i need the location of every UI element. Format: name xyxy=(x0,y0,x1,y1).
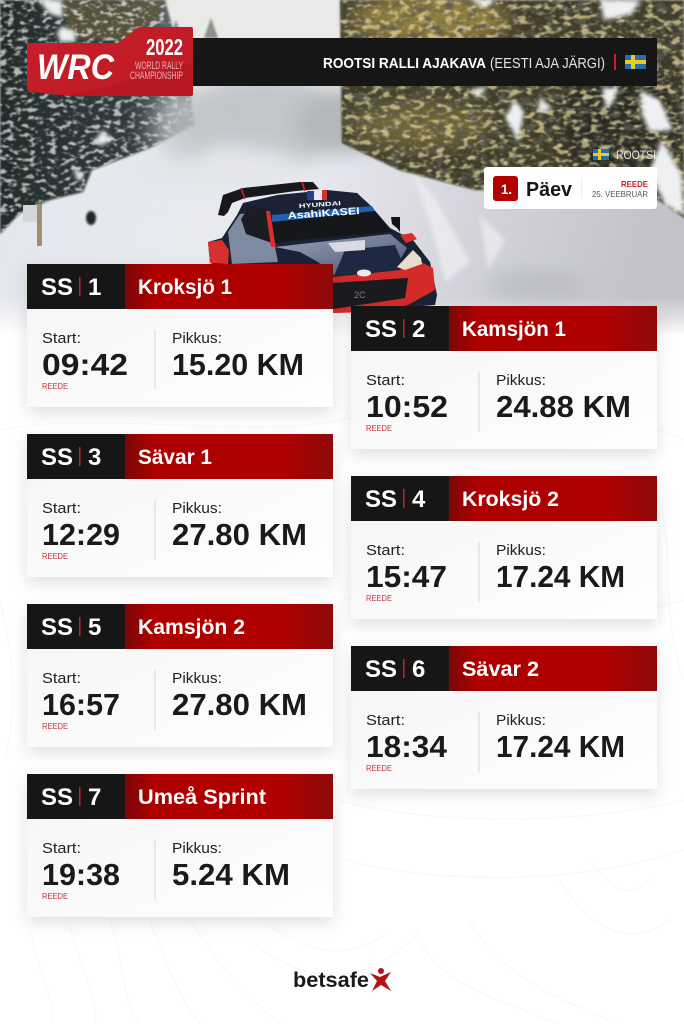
hero photo: snowy rally stage xyxy=(0,0,684,336)
stage card: SS 7: 5.24 KM xyxy=(172,857,290,892)
stage card: SS 4: 4 xyxy=(412,486,426,513)
stage card: SS 2: Kamsjön 1 xyxy=(462,318,566,341)
side panel xyxy=(228,212,278,264)
windshield xyxy=(272,211,392,243)
stage card: SS 7: Pikkus: xyxy=(172,840,222,857)
sky xyxy=(0,0,684,140)
stage card: SS 6: SS xyxy=(365,656,397,683)
year: 2022 xyxy=(146,34,183,60)
stage card: SS 4: REEDE xyxy=(366,594,392,603)
stage card: SS 3: 3 xyxy=(88,444,101,471)
championship name xyxy=(130,60,183,82)
stage card: SS 6: REEDE xyxy=(366,764,392,773)
red nose stripe xyxy=(333,258,435,313)
stage card: SS 3: Sävar 1 xyxy=(138,446,212,469)
stage card: SS 1 xyxy=(27,264,333,407)
header title: ROOTSI RALLI AJAKAVA xyxy=(323,55,486,72)
car body xyxy=(208,190,437,313)
stage card: SS 2: Start: xyxy=(366,372,405,389)
stage card: SS 4: 17.24 KM xyxy=(496,559,625,594)
stage card: SS 5: Start: xyxy=(42,670,81,687)
country label xyxy=(593,149,656,162)
championship name: WORLD RALLY xyxy=(135,60,183,72)
rally car: HYUNDAI xyxy=(299,201,342,210)
WRC wordmark: WRC xyxy=(37,48,115,87)
topographic line pattern xyxy=(0,407,684,1024)
rear arch xyxy=(208,240,229,264)
stage card: SS 7: REEDE xyxy=(42,892,68,901)
stage card: SS 6 xyxy=(351,646,657,789)
header subtitle: (EESTI AJA JÄRGI) xyxy=(490,55,605,72)
stage card: SS 3: 12:29 xyxy=(42,517,120,552)
stage card: SS 4: Start: xyxy=(366,542,405,559)
hood xyxy=(275,234,407,275)
snow road xyxy=(0,120,684,335)
stage card: SS 7: 7 xyxy=(88,784,101,811)
stage card: SS 3: Pikkus: xyxy=(172,500,222,517)
stage card: SS 1: Pikkus: xyxy=(172,330,222,347)
header bar xyxy=(193,38,657,86)
snow wheel tracks xyxy=(412,172,505,282)
stage card: SS 5: REEDE xyxy=(42,722,68,731)
headlight xyxy=(397,250,422,270)
stage card: SS 1: 09:42 xyxy=(42,347,128,382)
stage card: SS 3: SS xyxy=(41,444,73,471)
stage card: SS 5 xyxy=(27,604,333,747)
stage card: SS 5: 5 xyxy=(88,614,101,641)
date xyxy=(592,179,648,199)
front grille xyxy=(333,278,408,309)
stage card: SS 1: REEDE xyxy=(42,382,68,391)
day number: 1. xyxy=(501,181,512,197)
sponsor banner xyxy=(272,206,375,222)
stage card: SS 2: SS xyxy=(365,316,397,343)
stage card: SS 7: Umeå Sprint xyxy=(138,786,266,809)
stage card: SS 6: Pikkus: xyxy=(496,712,546,729)
stage card: SS 6: 17.24 KM xyxy=(496,729,625,764)
stage card: SS 3: Start: xyxy=(42,500,81,517)
stage card: SS 1: 1 xyxy=(88,274,101,301)
WRC logo xyxy=(27,27,193,96)
stage card: SS 7: Start: xyxy=(42,840,81,857)
stage card: SS 6: Sävar 2 xyxy=(462,658,539,681)
rally car: 2C xyxy=(354,290,366,300)
stage card: SS 2: Pikkus: xyxy=(496,372,546,389)
stage card: SS 7: SS xyxy=(41,784,73,811)
stage card: SS 5: SS xyxy=(41,614,73,641)
day label: Päev xyxy=(526,179,573,201)
stage card: SS 2: 2 xyxy=(412,316,425,343)
rally car: AsahiKASEI xyxy=(287,206,360,222)
stage card: SS 4: 15:47 xyxy=(366,559,447,594)
stage card: SS 4: Pikkus: xyxy=(496,542,546,559)
stage card: SS 6: Start: xyxy=(366,712,405,729)
right mirror xyxy=(391,217,400,232)
stage card: SS 2: 24.88 KM xyxy=(496,389,631,424)
rally car xyxy=(208,182,437,313)
day number xyxy=(493,176,518,201)
roof flag xyxy=(307,190,327,200)
stage card: SS 6: 6 xyxy=(412,656,425,683)
icon: betsafe figure xyxy=(370,968,391,991)
right golden fir trees xyxy=(340,0,684,220)
stage card: SS 5: Kamsjön 2 xyxy=(138,616,245,639)
stage card: SS 4: SS xyxy=(365,486,397,513)
stage card: SS 6: 18:34 xyxy=(366,729,448,764)
stage card: SS 7 xyxy=(27,774,333,917)
betsafe logo: betsafe xyxy=(293,969,369,992)
day badge xyxy=(484,167,657,209)
stage card: SS 5: 16:57 xyxy=(42,687,120,722)
championship name: CHAMPIONSHIP xyxy=(130,70,183,82)
stage card: SS 3: REEDE xyxy=(42,552,68,561)
stage card: SS 2: 10:52 xyxy=(366,389,448,424)
icon: Swedish flag xyxy=(625,55,646,69)
stage card: SS 1: Start: xyxy=(42,330,81,347)
side window xyxy=(241,206,272,243)
stage card: SS 4: Kroksjö 2 xyxy=(462,488,559,511)
stage card: SS 1: SS xyxy=(41,274,73,301)
country label: ROOTSI xyxy=(616,150,656,162)
stage card: SS 5: 27.80 KM xyxy=(172,687,307,722)
stage card: SS 3: 27.80 KM xyxy=(172,517,307,552)
stage card: SS 2 xyxy=(351,306,657,449)
rear wing xyxy=(218,182,319,216)
left snowy fir trees xyxy=(0,0,215,240)
red pillar xyxy=(266,211,276,247)
stage card: SS 1: 15.20 KM xyxy=(172,347,304,382)
date: REEDE xyxy=(621,179,648,189)
stage card: SS 7: 19:38 xyxy=(42,857,120,892)
stage card: SS 5: Pikkus: xyxy=(172,670,222,687)
distant tree tops xyxy=(170,18,218,38)
stage card: SS 2: REEDE xyxy=(366,424,392,433)
date: 25. VEEBRUAR xyxy=(592,189,648,199)
stage card: SS 1: Kroksjö 1 xyxy=(138,276,232,299)
emblem xyxy=(357,270,371,276)
fog cloud xyxy=(125,76,395,194)
stage card: SS 3 xyxy=(27,434,333,577)
stage card: SS 4 xyxy=(351,476,657,619)
roadside sign post xyxy=(23,204,96,246)
